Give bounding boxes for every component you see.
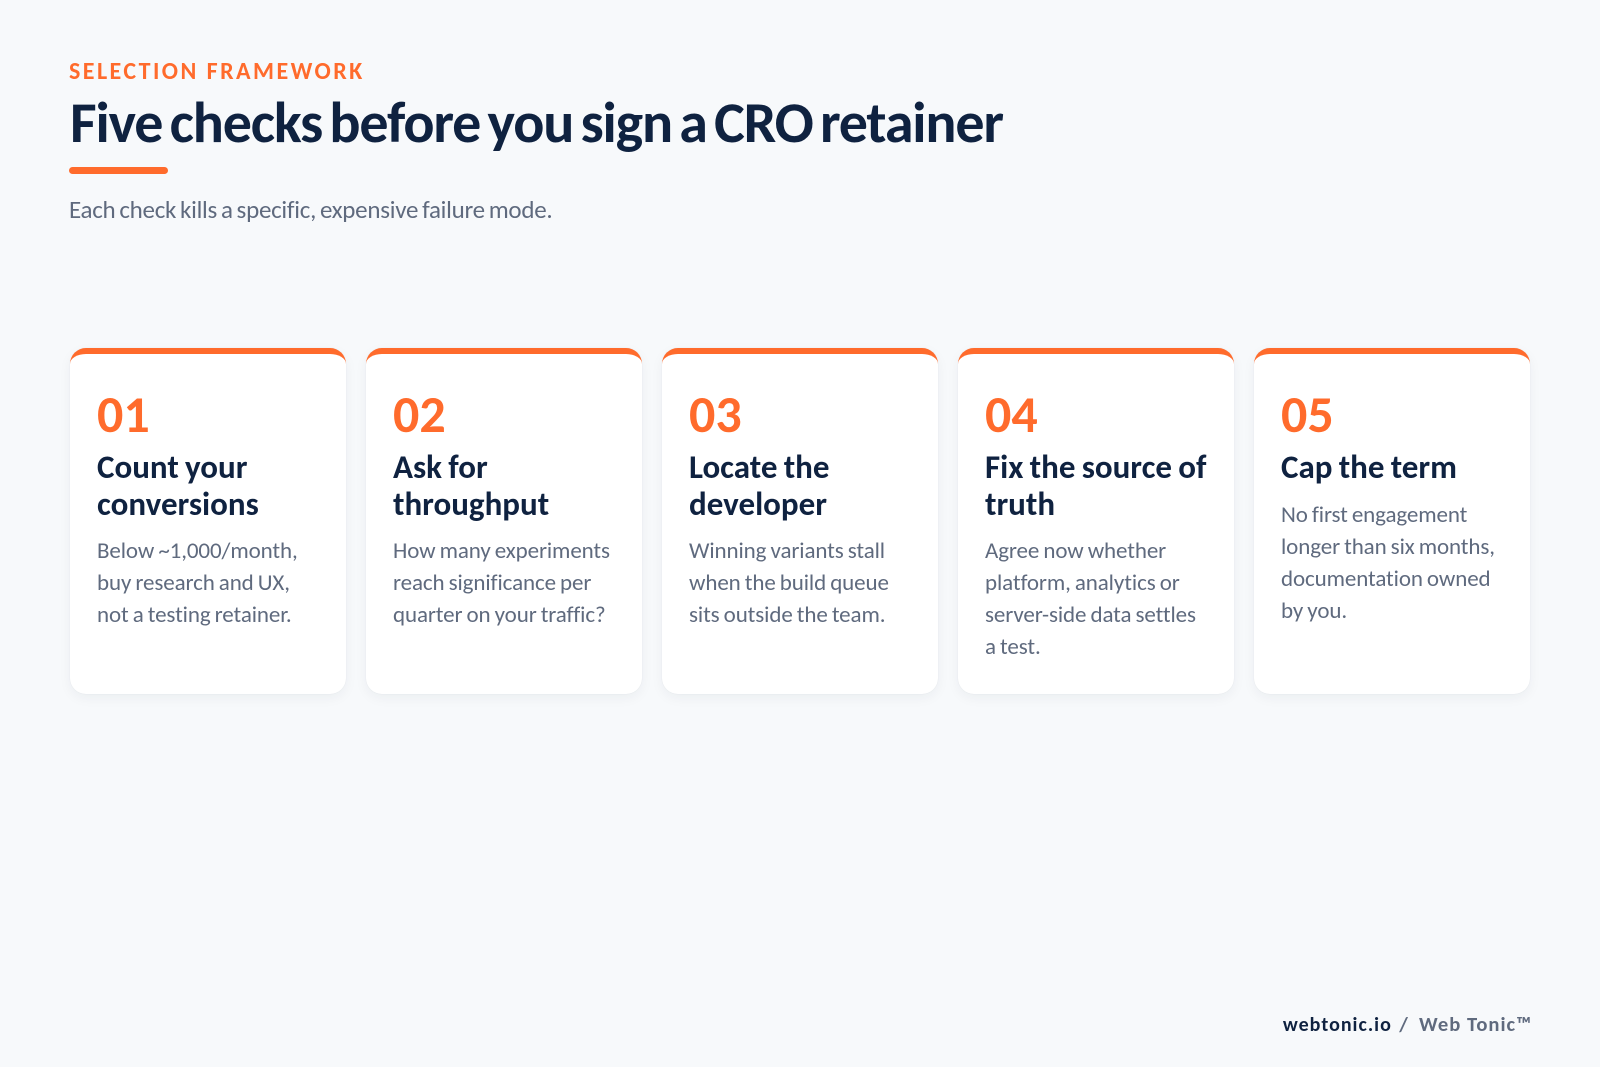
body 04: platform, analyt‌ics or bbox=[985, 569, 1180, 597]
heading 02: Ask for bbox=[393, 447, 488, 487]
eyebrow label: SELECTION FRAMEWORK bbox=[69, 57, 365, 86]
card 02 bbox=[366, 348, 642, 694]
body 05: No first engagement bbox=[1281, 501, 1467, 529]
heading 01: conversions bbox=[97, 484, 259, 524]
heading 04 bbox=[985, 447, 1206, 524]
body 03: sits outside the team. bbox=[689, 601, 885, 629]
body 01: buy research and UX, bbox=[97, 569, 290, 597]
body 02: How many experiments bbox=[393, 537, 610, 565]
body 02: quarter on your traffic? bbox=[393, 601, 606, 629]
card 04 bbox=[958, 348, 1234, 694]
body 04 bbox=[985, 537, 1196, 661]
heading 03 bbox=[689, 447, 829, 524]
heading 02 bbox=[393, 447, 549, 524]
body 04: Agree now whether bbox=[985, 537, 1166, 565]
card 03 bbox=[662, 348, 938, 694]
body 04: server-side data set‌tles bbox=[985, 601, 1196, 629]
number 05: 05 bbox=[1281, 382, 1334, 446]
number 03: 03 bbox=[689, 382, 742, 446]
body 01: Below ~1,000/month, bbox=[97, 537, 298, 565]
heading 02: throughput bbox=[393, 484, 549, 524]
body 02: reach significance per bbox=[393, 569, 591, 597]
heading 03: Locate the bbox=[689, 447, 829, 487]
card 05 bbox=[1254, 348, 1530, 694]
body 02 bbox=[393, 537, 610, 629]
card 01 bbox=[70, 348, 346, 694]
body 01 bbox=[97, 537, 298, 629]
number 01: 01 bbox=[97, 382, 150, 446]
heading 01: Count your bbox=[97, 447, 247, 487]
body 03 bbox=[689, 537, 889, 629]
body 05: longer than six months, bbox=[1281, 533, 1495, 561]
heading 03: developer bbox=[689, 484, 827, 524]
number 04: 04 bbox=[985, 382, 1038, 446]
heading 05: Cap the term bbox=[1281, 447, 1457, 487]
body 05 bbox=[1281, 501, 1495, 625]
heading 04: Fix the source of bbox=[985, 447, 1206, 487]
number 02: 02 bbox=[393, 382, 446, 446]
body 03: when the build queue bbox=[689, 569, 889, 597]
body 05: documentation owned bbox=[1281, 565, 1491, 593]
body 04: a test. bbox=[985, 633, 1041, 661]
title: Five checks before you sign a CRO retainer bbox=[70, 87, 1003, 158]
footer credit: webtonic.io / Web Tonic™ bbox=[1283, 1011, 1532, 1037]
body 05: by you. bbox=[1281, 597, 1347, 625]
subtitle: Each check kills a specific, expensive failure mode. bbox=[69, 194, 552, 225]
body 01: not a test‌ing retainer. bbox=[97, 601, 292, 629]
heading 01 bbox=[97, 447, 259, 524]
title accent bar bbox=[69, 167, 168, 174]
body 03: Winning variants stall bbox=[689, 537, 885, 565]
heading 04: truth bbox=[985, 484, 1055, 524]
